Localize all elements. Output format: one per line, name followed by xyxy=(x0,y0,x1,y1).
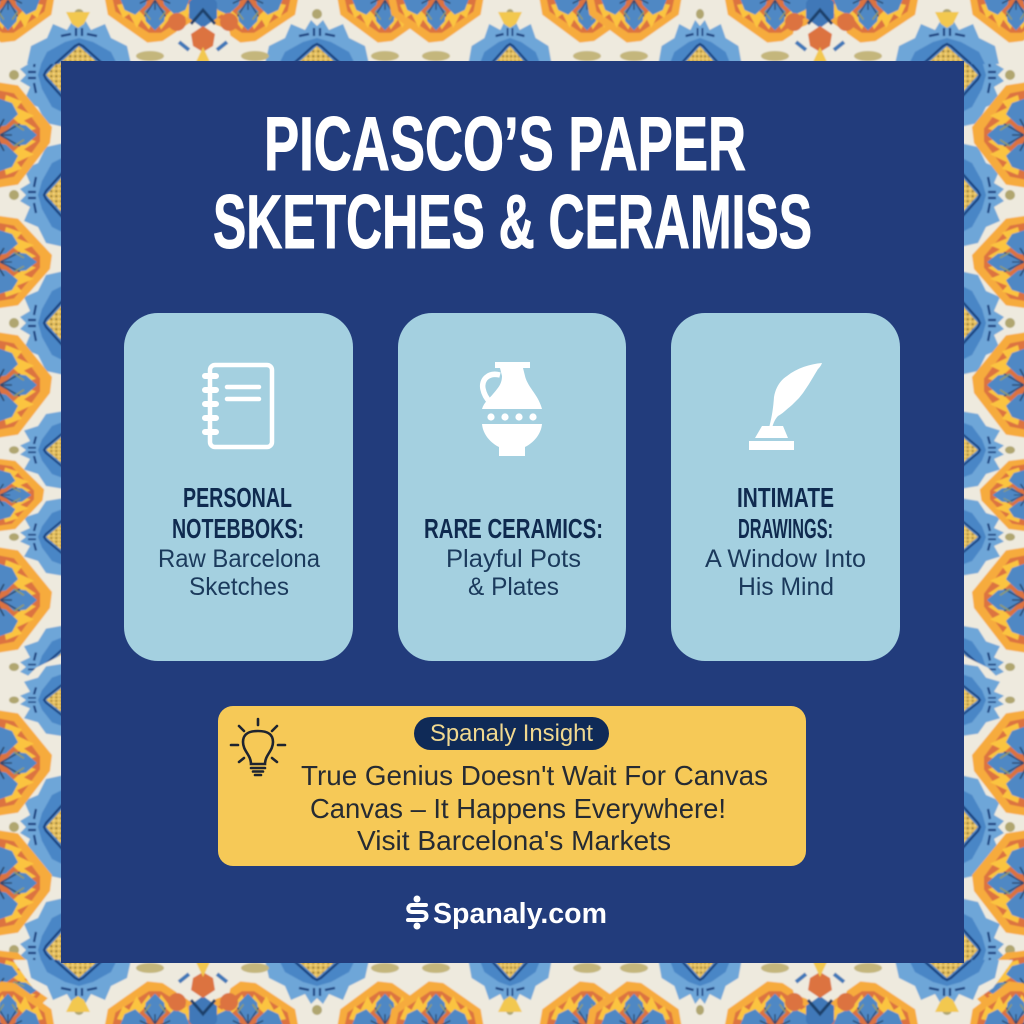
card text: intimate drawings: A Window Into xyxy=(705,545,866,573)
panel: intimate drawings xyxy=(671,313,900,661)
main navy panel xyxy=(61,61,964,963)
icon: Spanaly mark xyxy=(408,896,426,930)
insight badge xyxy=(414,717,609,750)
card text: rare ceramics xyxy=(424,513,603,601)
insight badge: Spanaly Insight xyxy=(430,720,593,747)
panel: personal notebooks xyxy=(124,313,353,661)
insight text: Visit Barcelona's Markets xyxy=(357,825,671,856)
card text: intimate drawings xyxy=(705,482,866,601)
card text: rare ceramics: Playful Pots xyxy=(446,545,581,573)
icon: spiral notebook xyxy=(205,365,272,447)
title xyxy=(213,102,812,265)
card text: intimate drawings: INTIMATE xyxy=(737,482,834,513)
card text: personal notebooks: Raw Barcelona xyxy=(158,545,320,573)
icon: ceramic jug xyxy=(482,362,542,456)
card text: rare ceramics: RARE CERAMICS: xyxy=(424,513,603,544)
card text: personal notebooks xyxy=(158,482,320,601)
card text: rare ceramics: & Plates xyxy=(468,573,559,601)
icon: quill and inkwell xyxy=(749,363,822,450)
insight text xyxy=(301,760,768,856)
insight text: Canvas – It Happens Everywhere! xyxy=(310,793,726,824)
card text: intimate drawings: DRAWINGS: xyxy=(738,513,833,544)
card text: personal notebooks: PERSONAL xyxy=(183,482,292,513)
card text: intimate drawings: His Mind xyxy=(738,573,834,601)
panel: rare ceramics xyxy=(398,313,626,661)
icon: light bulb xyxy=(231,719,285,775)
callout: Spanaly insight xyxy=(218,706,806,866)
title: PICASCO’S PAPER xyxy=(264,102,746,187)
card text: personal notebooks: NOTEBBOKS: xyxy=(172,513,304,544)
brand logo: Spanaly.com xyxy=(433,898,607,930)
insight text: True Genius Doesn't Wait For Canvas xyxy=(301,760,768,791)
card text: personal notebooks: Sketches xyxy=(189,573,289,601)
